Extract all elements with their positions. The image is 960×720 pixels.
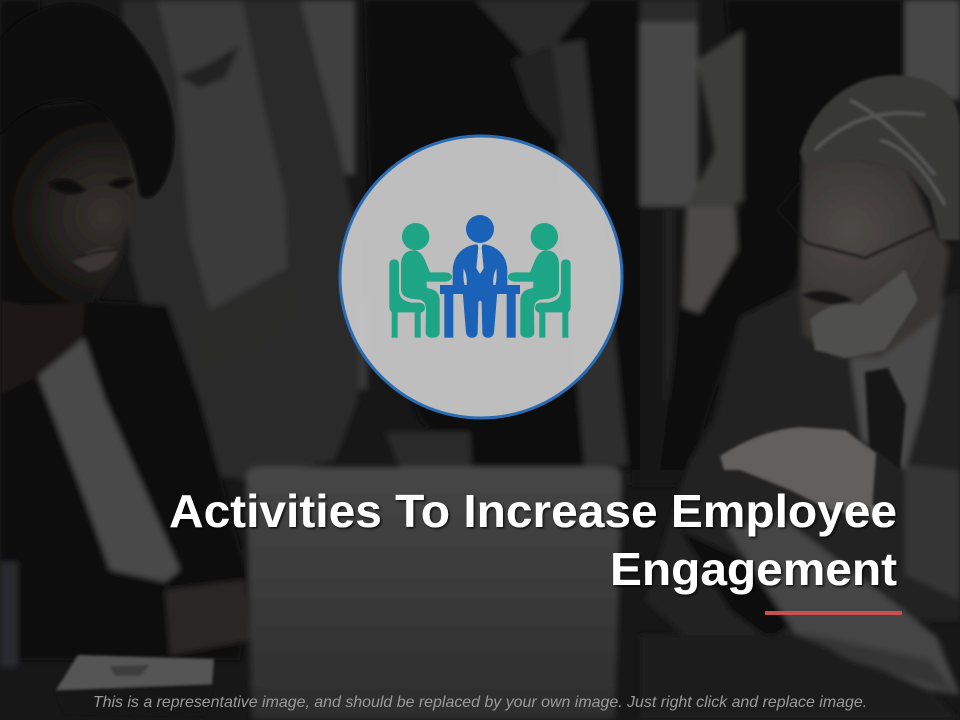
title [169, 485, 897, 595]
footer note: This is a representative image, and should be replaced by your own image. Just right click and replace image. [93, 694, 867, 711]
circle badge [340, 136, 622, 418]
red accent rule [765, 611, 902, 615]
woman at laptop [0, 0, 40, 330]
centre standing man [364, 0, 640, 470]
icon: centre person in suit at table [440, 215, 520, 338]
icon: left seated person [389, 223, 452, 338]
title: Engagement [610, 543, 897, 595]
standing woman [122, 0, 358, 480]
scarf [683, 30, 743, 313]
right man jacket, shirt, neck [645, 287, 960, 650]
icon: right seated person [508, 223, 571, 338]
title: Activities To Increase Employee [169, 485, 897, 537]
icon: three people meeting at a table [389, 215, 571, 338]
glass [0, 562, 18, 667]
laptop [246, 467, 622, 720]
